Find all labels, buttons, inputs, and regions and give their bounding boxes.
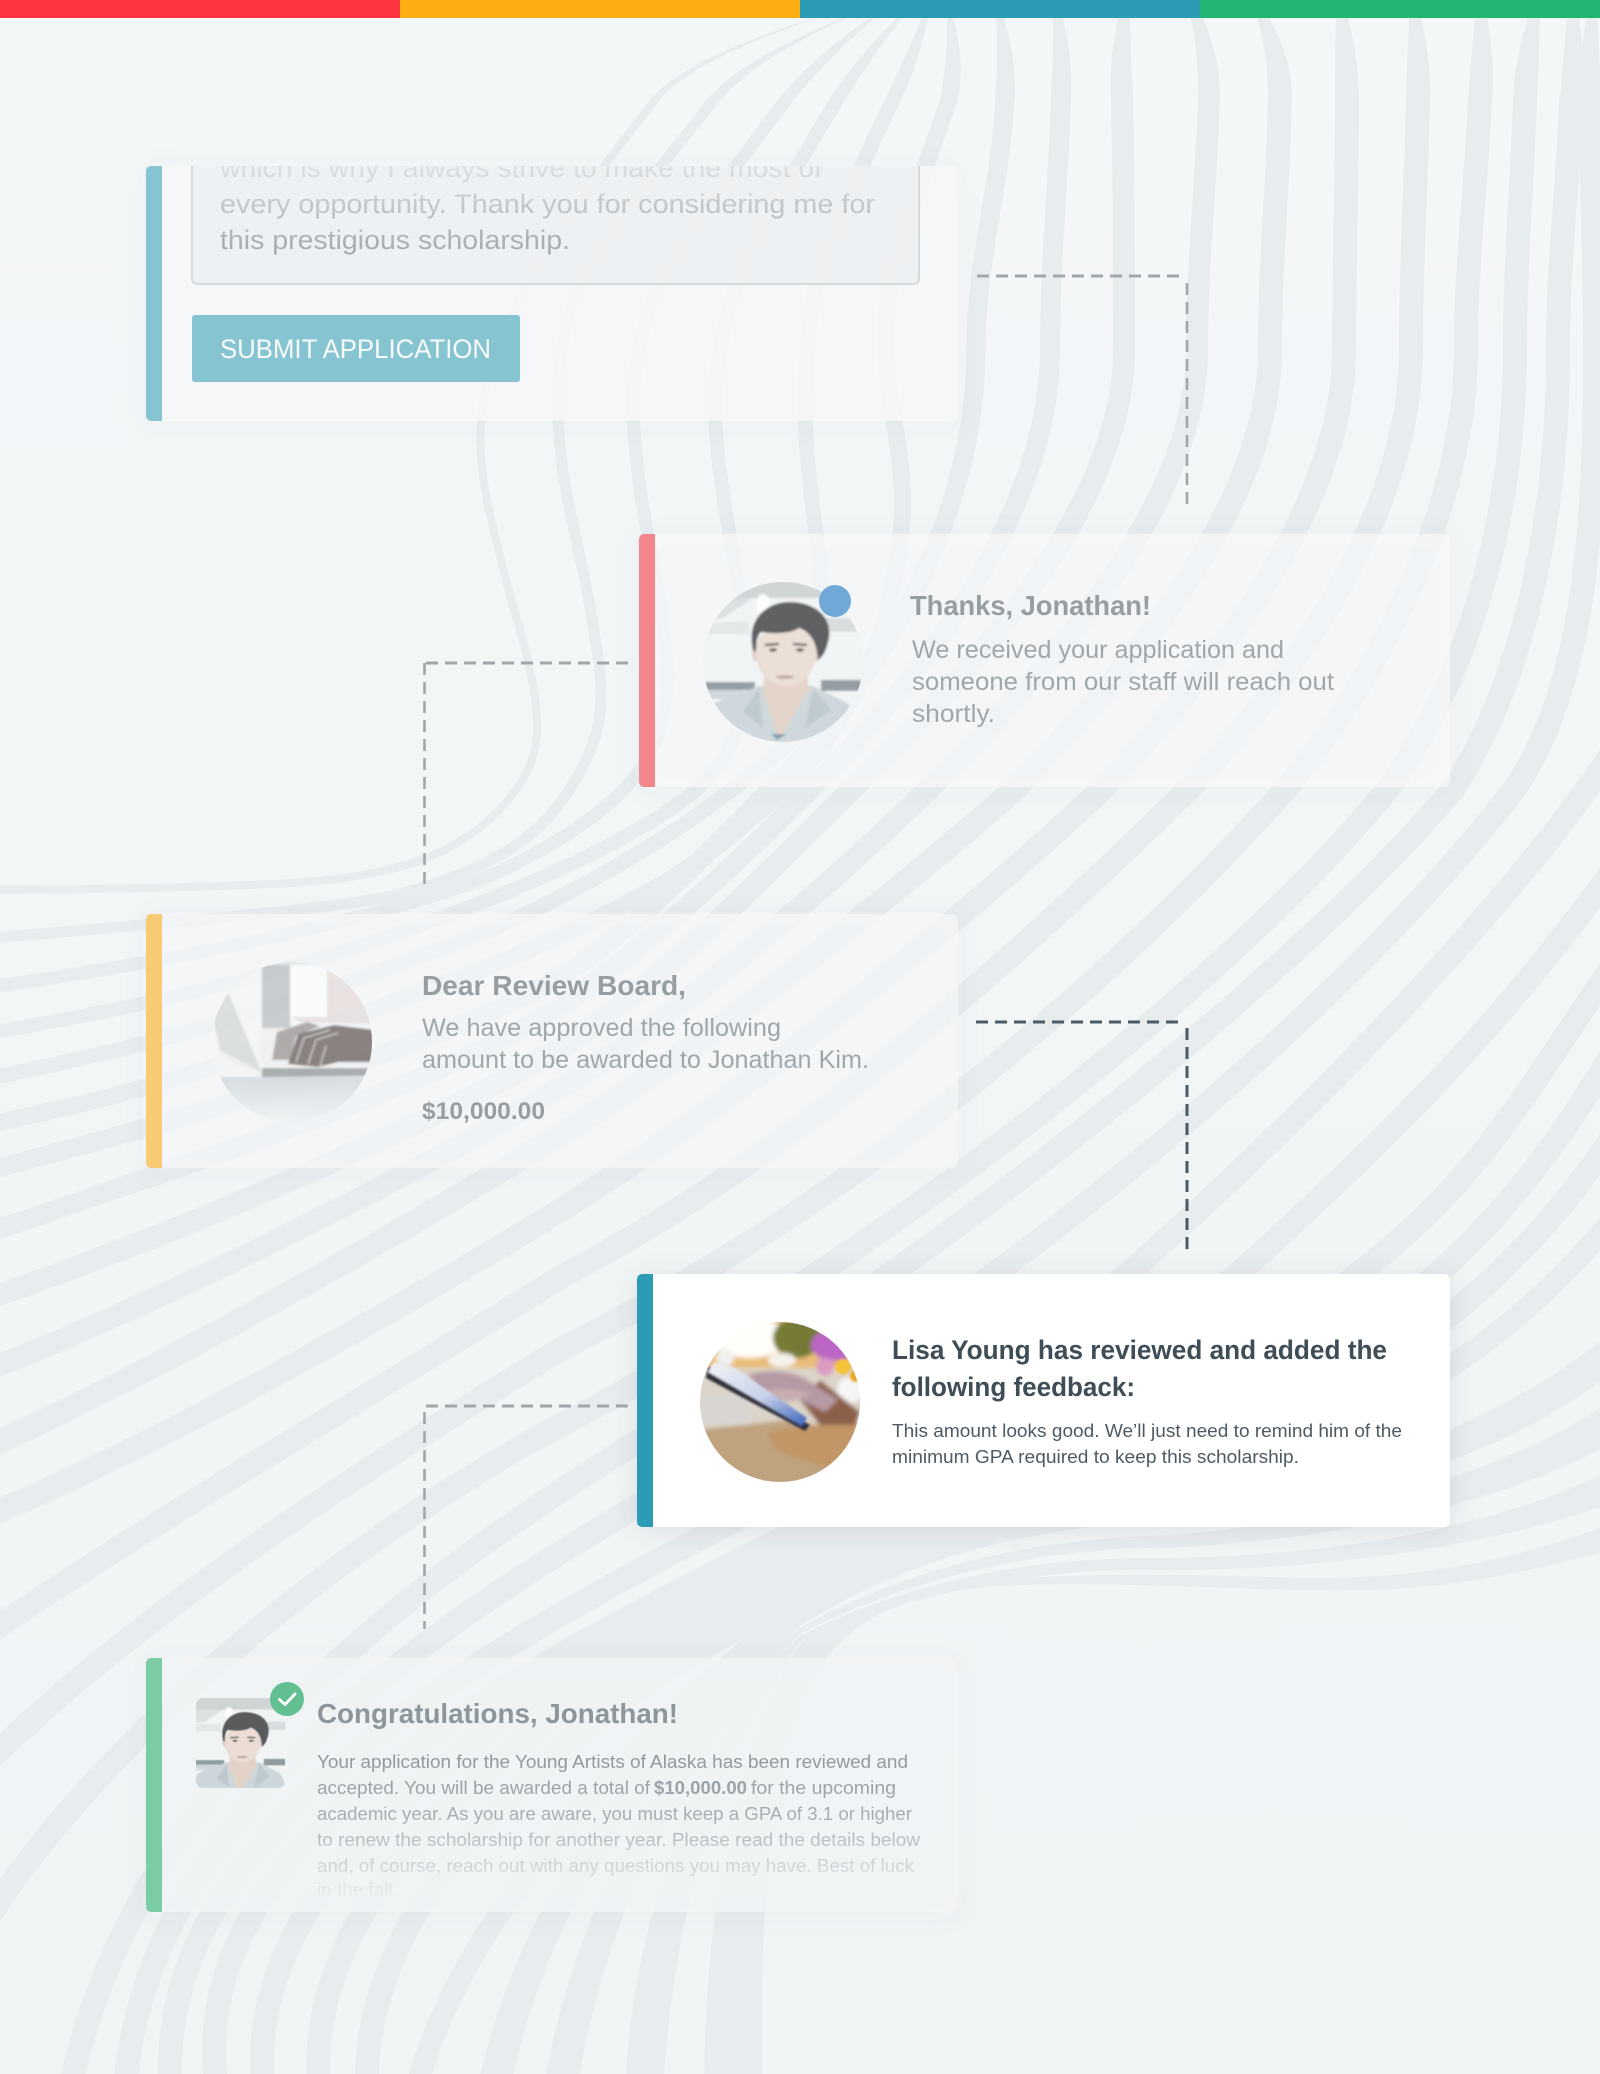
photo: Jonathan avatar (706, 582, 861, 742)
heading: Lisa Young has reviewed and added the (892, 1335, 1387, 1365)
award letter text: in the fall. (317, 1880, 398, 1900)
arrow: connector from form to confirmation (977, 276, 1187, 507)
heading: Congratulations, Jonathan! (317, 1698, 678, 1729)
card accent stripe: green (146, 1658, 162, 1912)
award letter text (317, 1752, 921, 1900)
icon: check badge (270, 1682, 304, 1716)
photo: Jonathan thumbnail (196, 1698, 285, 1788)
panel: congratulations card (146, 1658, 958, 1912)
award letter text: $10,000.00 (654, 1778, 747, 1798)
heading: Thanks, Jonathan! (910, 590, 1151, 621)
feedback message (892, 1420, 1402, 1467)
background: tapered wave stripes folding toward the bottom (477, 1325, 1600, 2074)
arrow: connector from reviewer feedback to award letter (424, 1406, 628, 1629)
arrow: connector from confirmation to review board (424, 663, 628, 886)
message (912, 636, 1334, 728)
panel: review board card (146, 914, 958, 1168)
award letter text: academic year. As you are aware, you must keep a GPA of 3.1 or higher (317, 1804, 912, 1824)
essay text: which is why I always strive to make the most of (219, 153, 823, 183)
award letter text: Your application for the Young Artists of Alaska has been reviewed and (317, 1752, 908, 1772)
message: someone from our staff will reach out (912, 668, 1334, 696)
card accent stripe: red (639, 534, 655, 787)
message: shortly. (912, 700, 995, 728)
card accent stripe: blue (637, 1274, 653, 1527)
message: We have approved the following (422, 1014, 781, 1042)
essay text box (192, 166, 919, 284)
essay text: this prestigious scholarship. (220, 225, 570, 255)
submit button (192, 315, 520, 382)
message: We received your application and (912, 636, 1284, 664)
feedback message: minimum GPA required to keep this scholarship. (892, 1446, 1299, 1467)
card accent stripe: teal (146, 166, 162, 421)
feedback message: This amount looks good. We’ll just need to remind him of the (892, 1420, 1402, 1441)
award letter text: and, of course, reach out with any questions you may have. Best of luck (317, 1856, 915, 1876)
award letter text: accepted. You will be awarded a total of (317, 1778, 651, 1798)
message: amount to be awarded to Jonathan Kim. (422, 1046, 869, 1074)
panel: application form card (146, 153, 958, 421)
award letter text: to renew the scholarship for another year. Please read the details below (317, 1830, 921, 1850)
panel: reviewer feedback card (637, 1274, 1450, 1527)
top colour bar (0, 0, 1600, 18)
background: tapered stripe tops fanning from the colour bar (650, 18, 1600, 100)
award letter text: for the upcoming (751, 1778, 896, 1798)
photo: hands typing on laptop (214, 962, 372, 1114)
heading (892, 1335, 1387, 1402)
photo: hands holding smartphone (700, 1322, 860, 1482)
essay text (220, 166, 874, 254)
status dot (819, 585, 851, 617)
card accent stripe: yellow (146, 914, 162, 1168)
heading: following feedback: (892, 1372, 1135, 1402)
essay text: every opportunity. Thank you for considering me for (220, 189, 875, 219)
panel: confirmation card (639, 534, 1450, 787)
awarded amount: $10,000.00 (422, 1098, 545, 1125)
submit button: SUBMIT APPLICATION (220, 334, 491, 364)
arrow: connector from review board to reviewer feedback (976, 1022, 1187, 1252)
heading: Dear Review Board, (422, 970, 686, 1001)
message (422, 1014, 869, 1074)
